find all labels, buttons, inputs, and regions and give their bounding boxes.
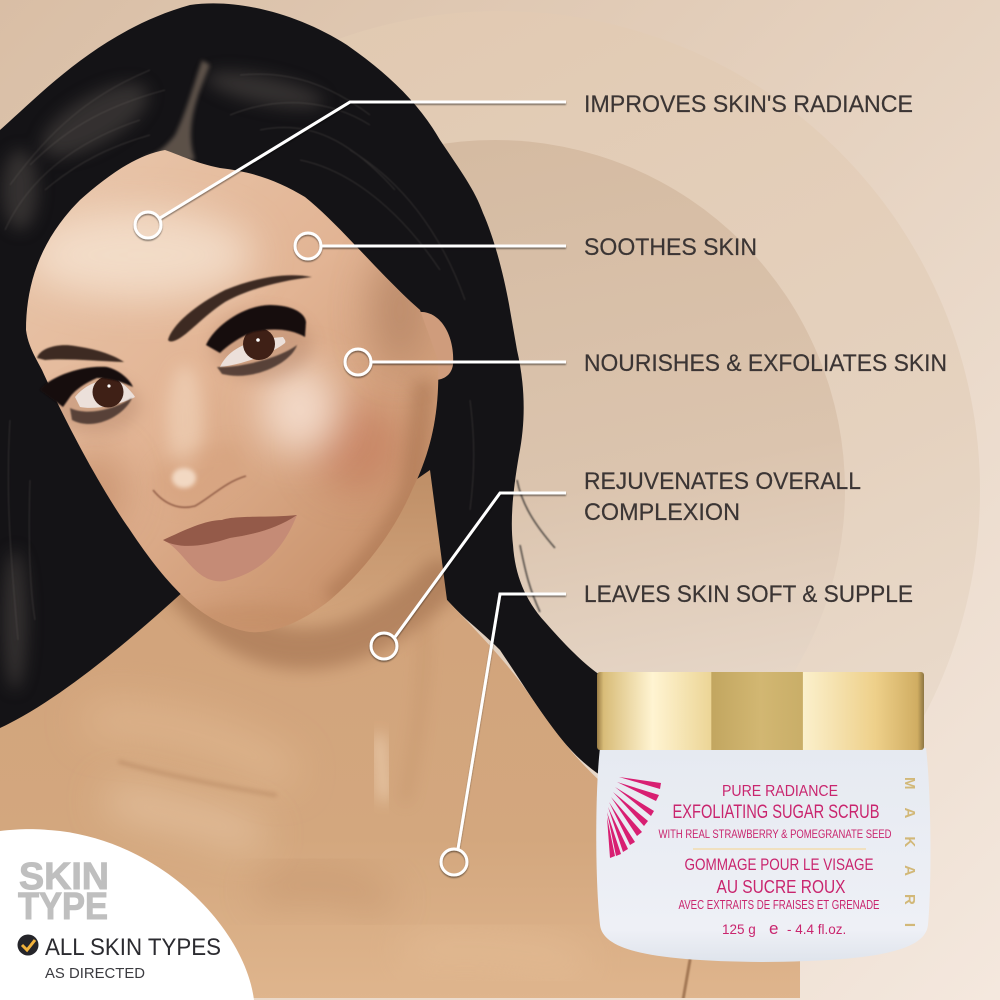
product jar (596, 672, 930, 962)
label 5: LEAVES SKIN SOFT & SUPPLE (584, 581, 913, 608)
jar text: e (769, 919, 778, 938)
skin type heading (18, 856, 109, 928)
ear (418, 312, 453, 380)
jar text: WITH REAL STRAWBERRY & POMEGRANATE SEED (658, 827, 892, 841)
callout: radiance line (135, 102, 566, 238)
label 4: REJUVENATES OVERALL (584, 468, 861, 495)
body: neck and shoulders (0, 460, 800, 1000)
icon: check (18, 934, 38, 956)
jar text: PURE RADIANCE (722, 783, 838, 800)
hair strands (5, 70, 474, 640)
jar logo rays (607, 777, 661, 858)
collarbone shading (108, 556, 692, 998)
all skin types: ALL SKIN TYPES (45, 934, 221, 961)
parting (143, 60, 210, 165)
jar lid (597, 672, 924, 750)
jar text: 125 g (722, 922, 756, 937)
skin type heading: SKIN (19, 856, 109, 898)
callout: rejuvenates line (371, 493, 566, 659)
skin type badge (0, 829, 254, 1000)
face (26, 150, 438, 632)
hair highlights (2, 64, 327, 690)
as directed: AS DIRECTED (45, 965, 145, 982)
jar text (658, 783, 892, 938)
jar text: EXFOLIATING SUGAR SCRUB (672, 802, 880, 823)
nose (153, 440, 247, 507)
hair wisps (517, 480, 555, 612)
label 4b: COMPLEXION (584, 499, 740, 526)
jar brand: MAKARI (901, 777, 918, 927)
benefit labels (584, 91, 947, 608)
eyes (40, 305, 306, 424)
cheek highlights and shadow (25, 210, 430, 636)
lips (163, 515, 297, 581)
jar text: AU SUCRE ROUX (716, 876, 846, 897)
label 1: IMPROVES SKIN'S RADIANCE (584, 91, 913, 118)
jar body (596, 748, 930, 962)
jar text: - 4.4 fl.oz. (787, 922, 846, 937)
eye shadow (50, 377, 140, 433)
label 2: SOOTHES SKIN (584, 234, 757, 261)
callout: soft line (441, 594, 566, 875)
model photo (0, 0, 800, 1000)
jar text: AVEC EXTRAITS DE FRAISES ET GRENADE (678, 898, 880, 912)
callout: nourishes line (345, 349, 566, 375)
lashes (40, 305, 306, 407)
skin type heading: TYPE (18, 886, 108, 928)
hair (0, 0, 620, 800)
label 3: NOURISHES & EXFOLIATES SKIN (584, 350, 947, 377)
callout: soothes line (295, 233, 566, 259)
callout lines (135, 102, 566, 875)
eyebrows (37, 275, 312, 362)
jar text: GOMMAGE POUR LE VISAGE (684, 855, 874, 874)
